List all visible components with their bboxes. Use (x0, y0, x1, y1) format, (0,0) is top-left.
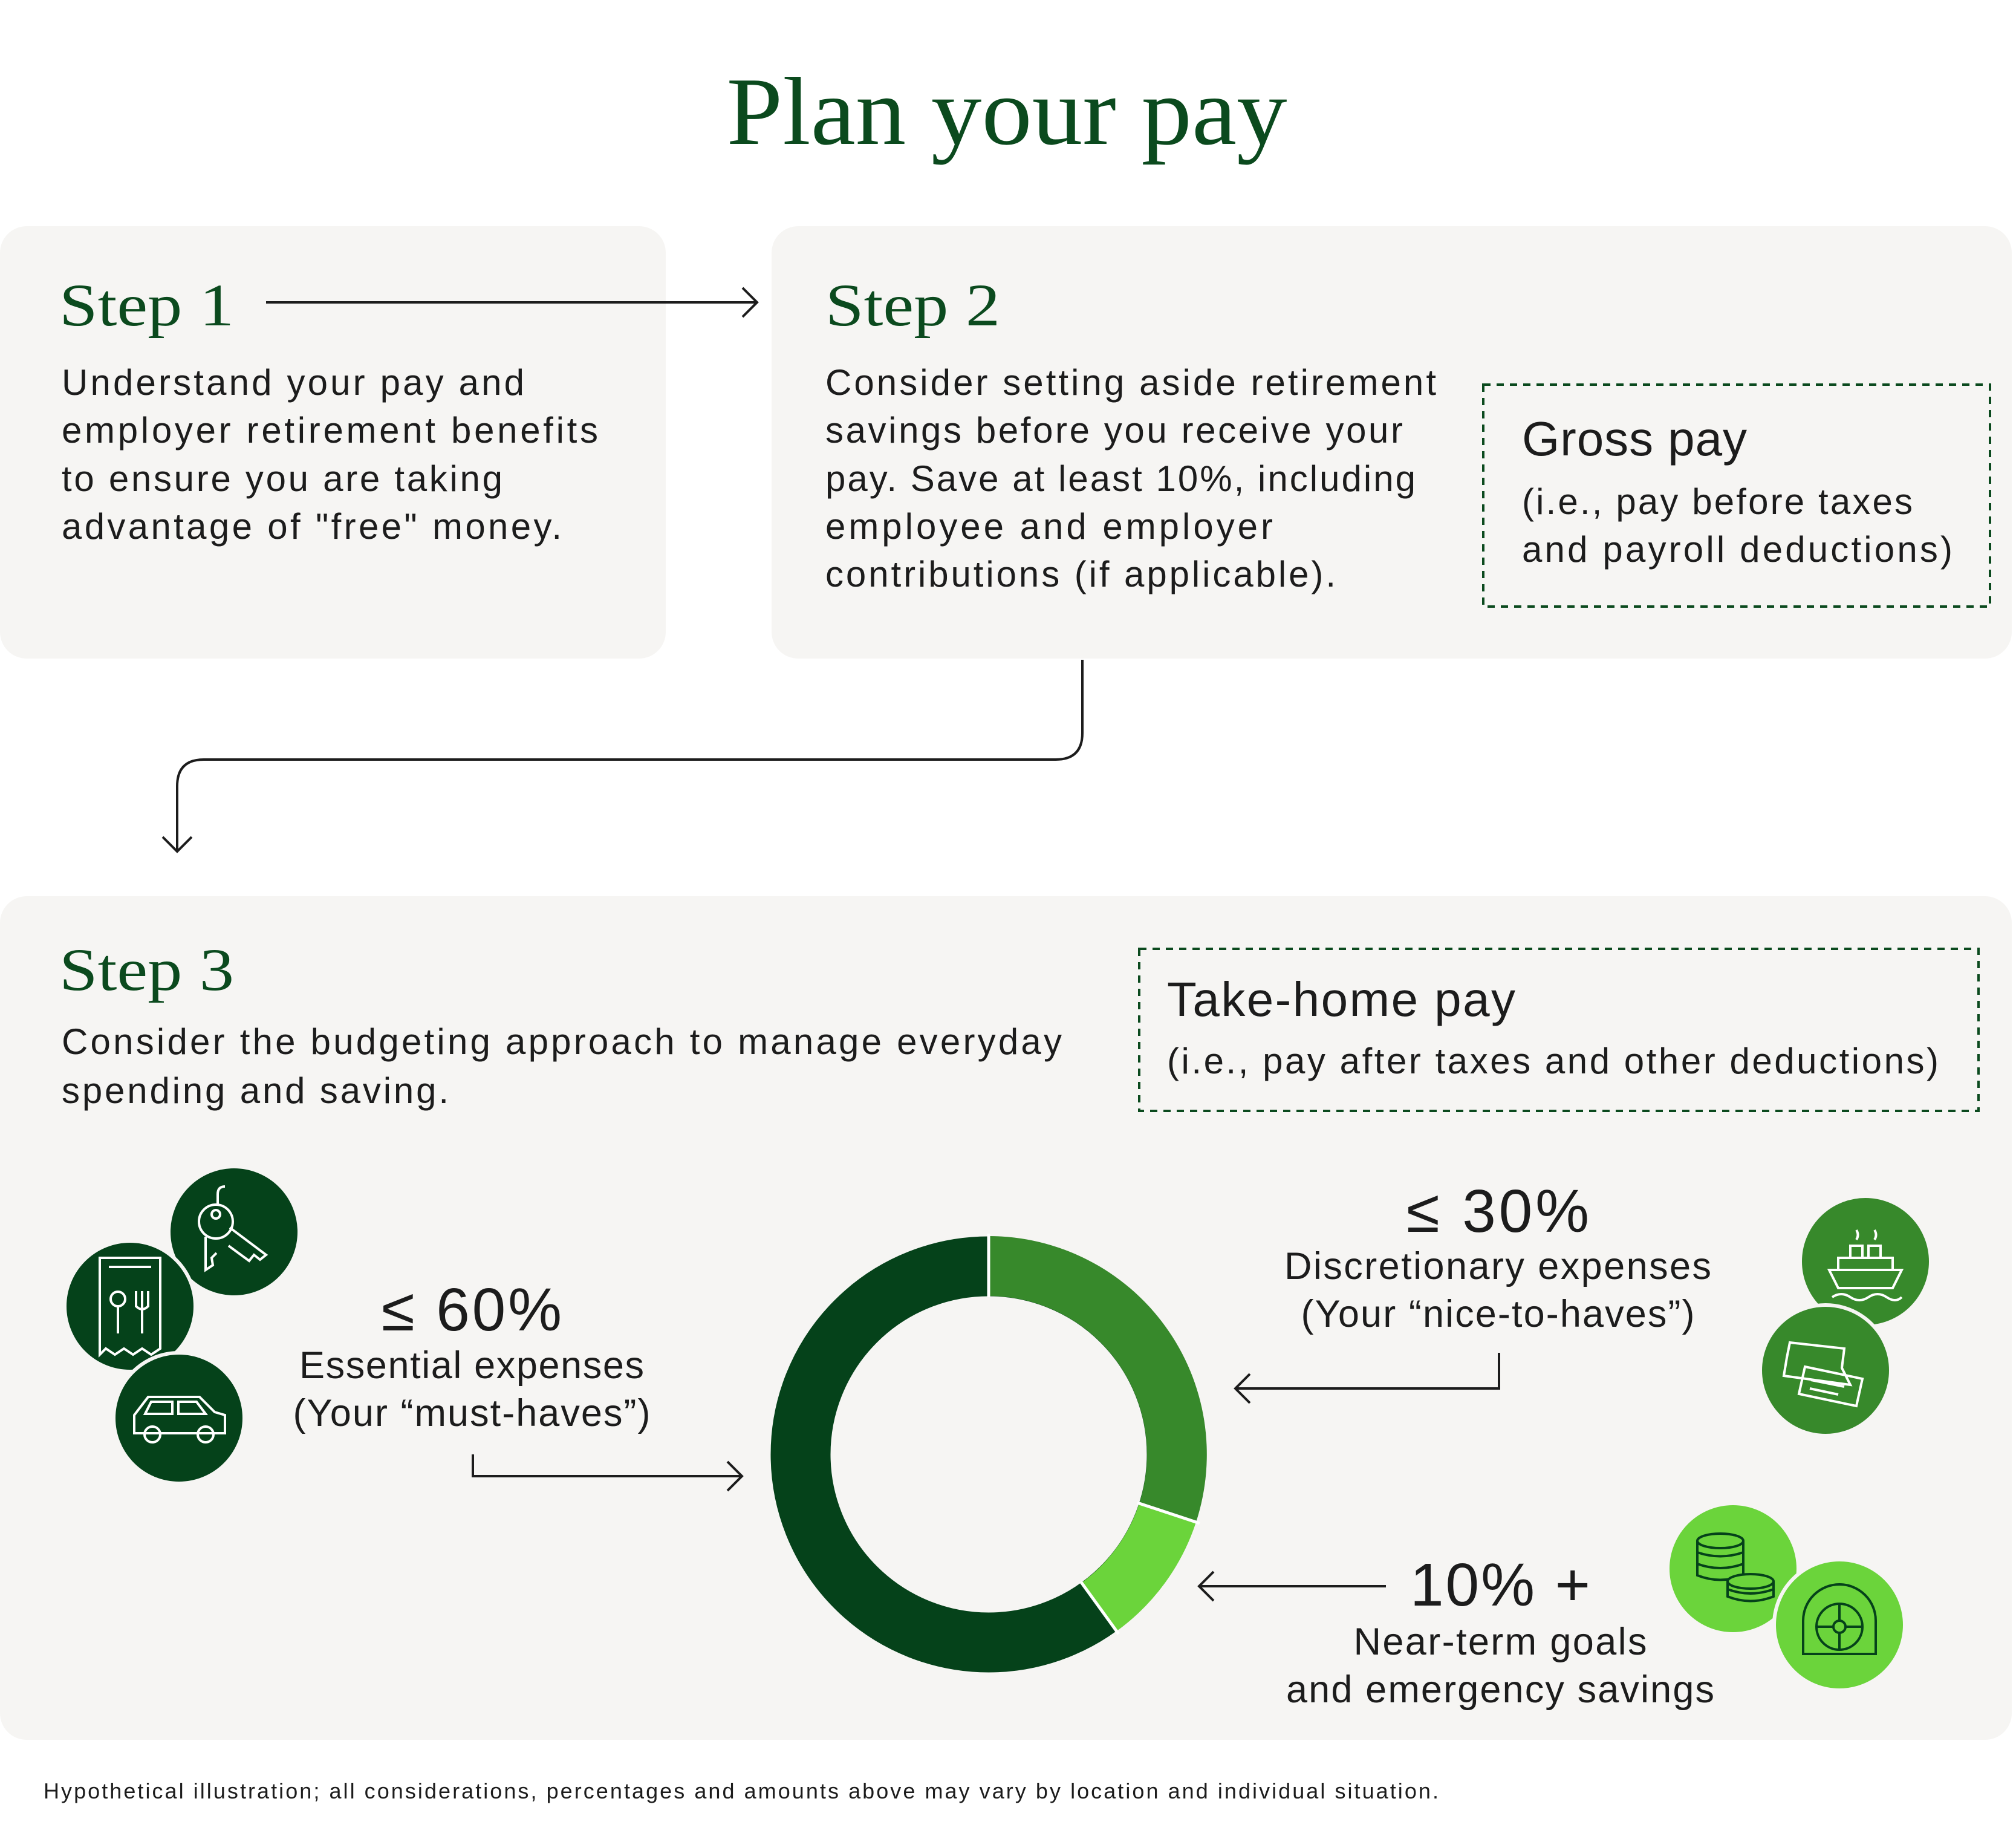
text: step 2 body: employee and employer (825, 506, 1273, 547)
arrow: discretionary (1235, 1353, 1499, 1403)
heading: step 1: Step 1 (59, 272, 234, 339)
label: 30% discretionary: Discretionary expenses (1284, 1245, 1711, 1287)
callout: take-home pay: (i.e., pay after taxes and other deductions) (1167, 1041, 1939, 1081)
label: 60% essential: Essential expenses (299, 1344, 644, 1387)
icon: keys (169, 1167, 299, 1297)
text: step 2 body: pay. Save at least 10%, including (825, 458, 1416, 499)
icon: safe (1774, 1560, 1905, 1690)
callout: gross pay: and payroll deductions) (1522, 529, 1953, 570)
text: step 3 body (62, 1021, 1062, 1111)
panel: step 2 (772, 226, 2012, 659)
label: 30% discretionary (1284, 1177, 1711, 1335)
footnote: Hypothetical illustration; all considerations, percentages and amounts above may vary by location and individual situation. (44, 1779, 1439, 1803)
text: step 1 body: advantage of "free" money. (62, 506, 562, 547)
donut chart (801, 1234, 1207, 1642)
callout: gross pay: (i.e., pay before taxes (1522, 481, 1913, 522)
icon: ship (1800, 1196, 1931, 1327)
heading: step 2: Step 2 (825, 272, 1000, 339)
label: 30% discretionary: (Your “nice-to-haves”) (1301, 1293, 1694, 1335)
text: step 1 body (62, 362, 598, 547)
label: 10% savings: and emergency savings (1286, 1668, 1714, 1711)
text: step 1 body: Understand your pay and (62, 362, 524, 403)
heading: step 3: Step 3 (59, 936, 234, 1003)
callout: gross pay: Gross pay (1522, 412, 1747, 466)
text: step 2 body: Consider setting aside retirement (825, 362, 1436, 403)
arrow: step 2 to step 3 (163, 660, 1082, 851)
icon: tickets (1760, 1305, 1891, 1436)
callout: take-home pay: Take-home pay (1167, 972, 1515, 1026)
icon: receipt (65, 1241, 195, 1372)
label: 10% savings: 10% + (1410, 1551, 1590, 1619)
label: 60% essential: ≤ 60% (382, 1276, 562, 1344)
text: step 1 body: employer retirement benefits (62, 410, 598, 451)
icon: coins (1668, 1503, 1798, 1634)
text: step 1 body: to ensure you are taking (62, 458, 502, 499)
panel: step 1 (0, 226, 666, 659)
panel: step 3 (0, 896, 2012, 1740)
arrow: savings (1199, 1572, 1386, 1601)
title: Plan your pay (727, 57, 1287, 165)
text: step 3 body: spending and saving. (62, 1070, 449, 1111)
text: step 3 body: Consider the budgeting approach to manage everyday (62, 1021, 1062, 1062)
arrow: essential (473, 1454, 742, 1491)
text: step 2 body (825, 362, 1436, 594)
text: step 2 body: contributions (if applicable). (825, 554, 1336, 594)
icon: car (114, 1353, 244, 1483)
label: 60% essential: (Your “must-haves”) (293, 1392, 651, 1434)
callout: gross pay (1483, 385, 1990, 607)
arrow: step 1 to step 2 (266, 288, 757, 317)
label: 60% essential (293, 1276, 651, 1434)
label: 10% savings (1286, 1551, 1714, 1711)
label: 30% discretionary: ≤ 30% (1406, 1177, 1589, 1245)
text: step 2 body: savings before you receive your (825, 410, 1403, 451)
callout: take-home pay (1139, 949, 1979, 1111)
label: 10% savings: Near-term goals (1353, 1621, 1647, 1663)
